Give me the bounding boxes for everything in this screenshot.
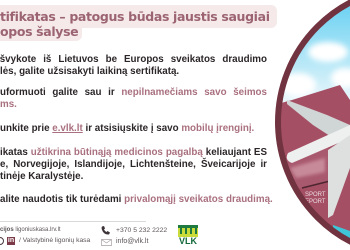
title: certificate heading xyxy=(0,5,277,41)
footer: email: info@vlk.lt xyxy=(116,238,148,245)
sky xyxy=(282,6,350,102)
turquoise strip xyxy=(333,225,350,238)
icon: linkedin xyxy=(7,237,15,245)
footer: institution name: / Valstybinė ligonių kasa xyxy=(19,237,90,244)
icon: social circle xyxy=(0,237,4,245)
image: passport and airplane in a circle: EPORT xyxy=(305,199,326,205)
paragraph: mandatory insurance: alite naudotis tik turėdami privalomąjį sveikatos draudimą. xyxy=(0,194,273,205)
airplane wing xyxy=(328,135,350,218)
icon: envelope xyxy=(101,239,112,246)
icon: phone xyxy=(102,226,110,234)
line: lės, galite užsisakyti laikiną sertifikatą. xyxy=(0,66,179,77)
airplane fuselage xyxy=(287,125,350,163)
circle ring xyxy=(278,0,350,250)
airplane wing back xyxy=(287,100,350,138)
footer: website: cijos ligoniuskasa.lrv.lt xyxy=(0,227,61,233)
paragraph: family members xyxy=(0,87,267,110)
logo: VLK xyxy=(178,225,198,246)
clouds xyxy=(280,42,350,97)
footer divider xyxy=(0,221,146,222)
line: e, Norvegijoje, Islandijoje, Lichtenšteine, Šveicarijoje ir xyxy=(0,159,267,170)
passport xyxy=(281,85,350,231)
footer: phone number: +370 5 232 2222 xyxy=(116,227,167,234)
icon: linkedin: in xyxy=(8,237,14,244)
line: išvykote iš Lietuvos be Europos sveikatos draudimo xyxy=(0,54,267,65)
paragraph: coverage xyxy=(0,147,267,182)
line: uformuoti galite sau ir nepilnamečiams savo šeimos xyxy=(0,87,267,98)
image: passport and airplane in a circle xyxy=(275,0,350,245)
line: tinėje Karalystėje. xyxy=(0,171,83,182)
paragraph: travel without insurance xyxy=(0,54,267,77)
passport text: SPORT xyxy=(305,192,326,198)
logo text: VLK xyxy=(179,236,197,246)
passport page gap xyxy=(302,181,330,188)
line: ms. xyxy=(0,99,17,110)
title background line 2 xyxy=(0,27,82,41)
line: ikatas užtikrina būtinąją medicinos pagalbą keliaujant ES xyxy=(0,147,267,158)
passport lower sheen xyxy=(286,148,328,188)
title background line 1 xyxy=(0,5,277,28)
title text line 1: tifikatas – patogus būdas jaustis saugiai xyxy=(0,9,270,24)
title text line 2: opos šalyse xyxy=(0,24,78,39)
paragraph: e.vlk.lt: unkite prie e.vlk.lt ir atsisiųskite į savo mobilų įrenginį. xyxy=(0,123,254,134)
logo mark xyxy=(178,225,198,237)
